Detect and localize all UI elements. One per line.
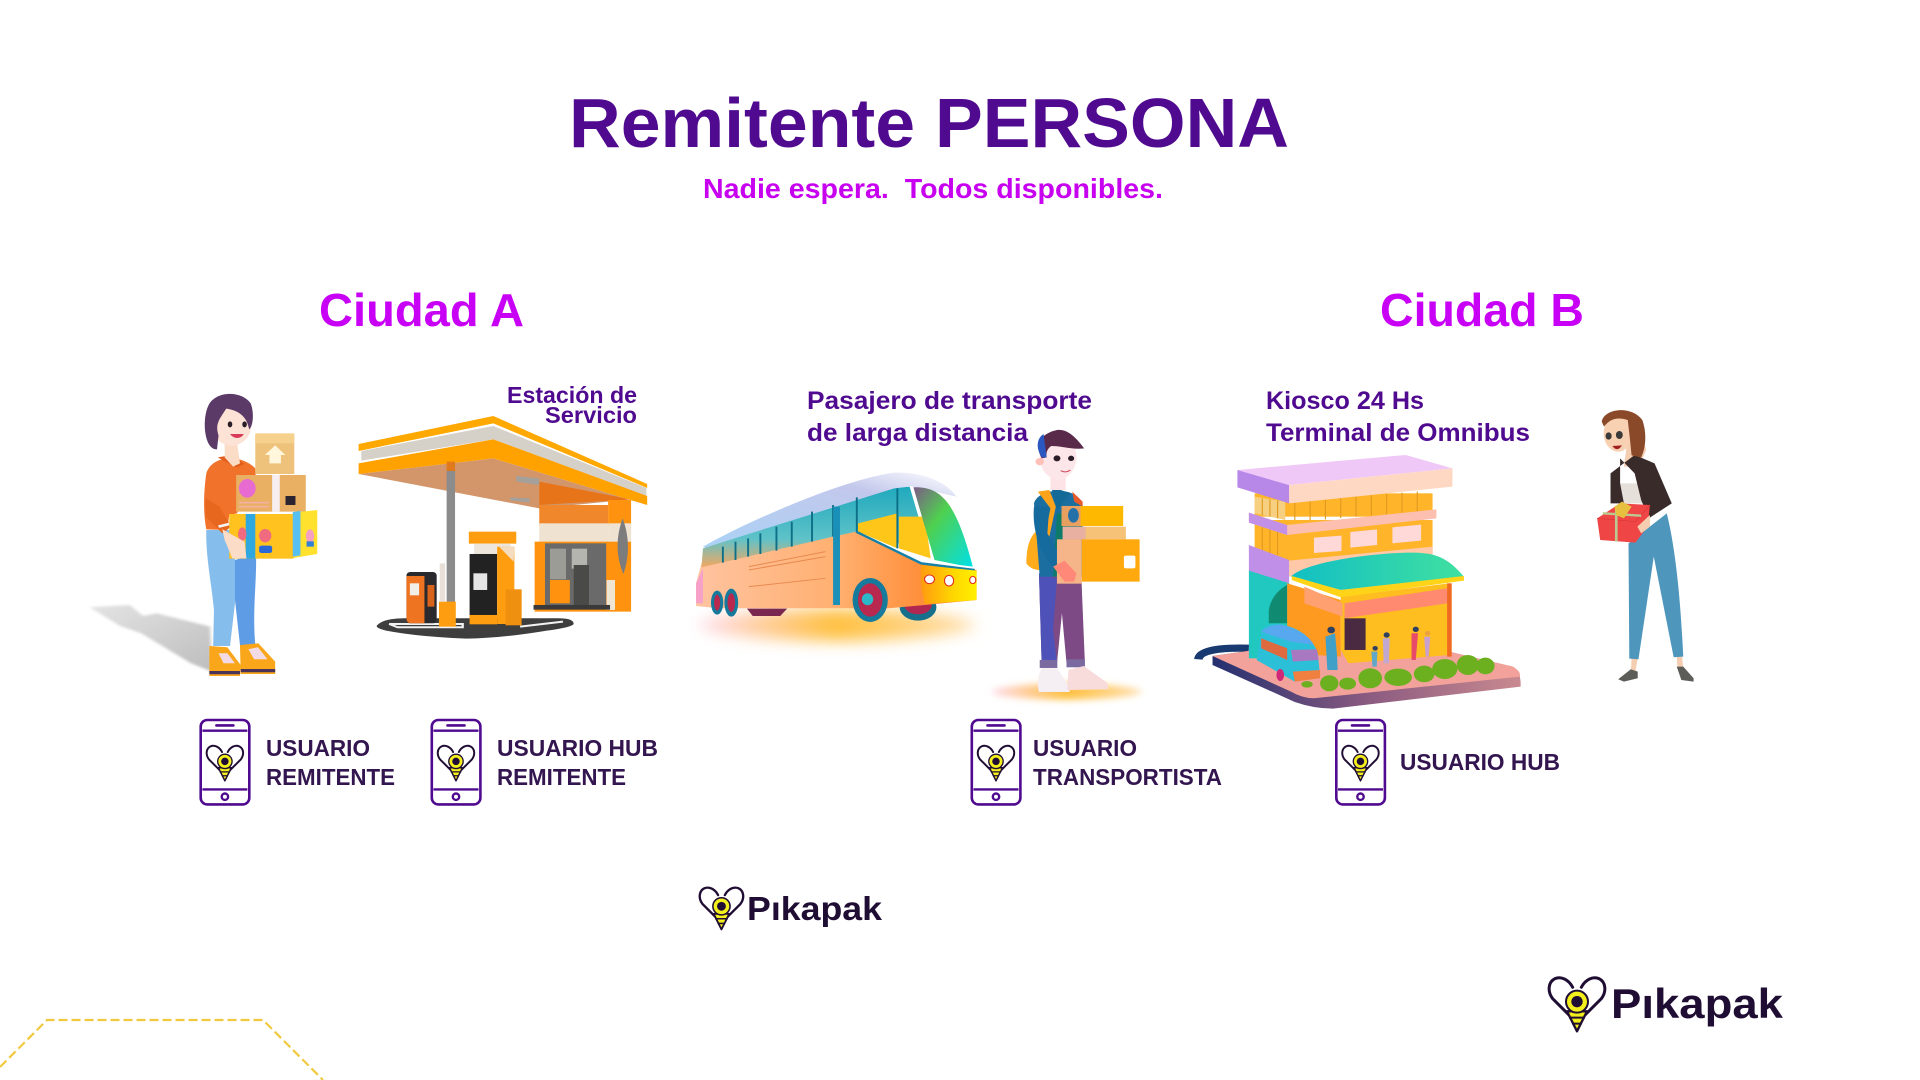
illustration: traveler with boxes [992,430,1141,700]
title: Remitente PERSONA [569,84,1289,162]
decorative dashed hexagon outline [0,1020,323,1080]
logo: Pikapak large: Pıkapak [1611,980,1784,1027]
illustration: long-distance bus [696,473,977,641]
label: Pasajero de transporte de larga distancia: Pasajero de transporte [807,387,1092,415]
label: Kiosco 24 Hs Terminal de Omnibus [1266,387,1530,447]
label: usuario remitente: USUARIO [266,735,370,761]
icon: app phone, usuario hub remitente [432,720,480,804]
label: usuario hub remitente: REMITENTE [497,764,626,790]
logo: Pikapak large [1549,978,1784,1031]
label: usuario hub remitente [497,735,658,790]
label: Estación de Servicio: Servicio [545,402,637,428]
icon: app phone, usuario transportista [972,720,1020,804]
label: usuario hub remitente: USUARIO HUB [497,735,658,761]
heading: Ciudad A: Ciudad A [319,284,524,336]
label: usuario transportista [1033,735,1222,790]
label: Estación de Servicio [507,382,637,428]
illustration: bus terminal kiosk [1198,455,1521,709]
label: usuario transportista: TRANSPORTISTA [1033,764,1222,790]
label: Pasajero de transporte de larga distancia [807,387,1092,447]
label: usuario remitente [266,735,395,790]
illustration: woman with boxes [90,394,317,676]
logo: Pikapak small: Pıkapak [747,890,883,927]
illustration: woman with gift [1597,410,1694,682]
illustration: gas station [359,416,647,639]
icon: app phone, usuario hub [1336,720,1385,804]
heading: Ciudad B: Ciudad B [1380,284,1584,336]
label: Pasajero de transporte de larga distancia: de larga distancia [807,419,1029,447]
icon: app phone, usuario remitente [201,720,249,804]
subtitle: Nadie espera. Todos disponibles. [703,173,1163,204]
label: Kiosco 24 Hs Terminal de Omnibus: Kiosco 24 Hs [1266,387,1424,415]
label: usuario hub: USUARIO HUB [1400,749,1560,775]
label: usuario transportista: USUARIO [1033,735,1137,761]
logo: Pikapak small [700,888,883,929]
label: Kiosco 24 Hs Terminal de Omnibus: Terminal de Omnibus [1266,419,1530,447]
label: Estación de Servicio: Estación de [507,382,637,408]
label: usuario remitente: REMITENTE [266,764,395,790]
